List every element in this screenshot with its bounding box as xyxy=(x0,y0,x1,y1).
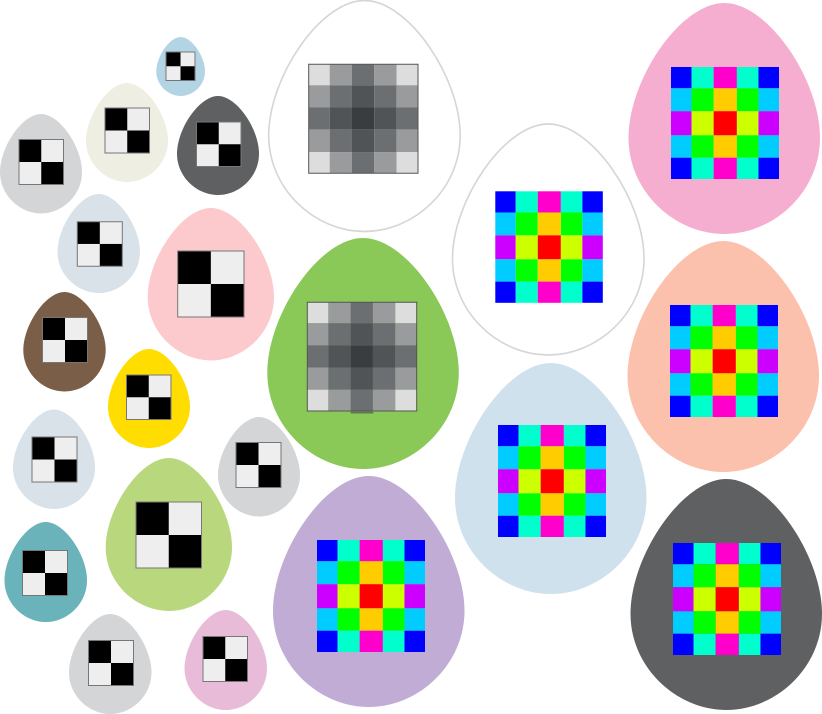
egg: dark grey with rainbow grid xyxy=(630,479,822,710)
egg: peach with rainbow grid xyxy=(628,241,819,472)
egg: beige xyxy=(86,83,168,182)
egg: brown xyxy=(23,292,106,391)
egg: pale blue-grey lower xyxy=(13,410,95,509)
egg: light grey upper left xyxy=(0,114,82,213)
egg: white outlined with grey grid xyxy=(269,0,460,232)
egg: light grey middle xyxy=(218,417,300,516)
egg: green with grey grid xyxy=(267,238,459,469)
egg: pink-lilac small xyxy=(184,610,267,710)
egg: teal xyxy=(4,522,87,622)
egg: light grey bottom xyxy=(69,614,152,714)
egg: pink with rainbow grid xyxy=(628,3,820,234)
egg: small blue xyxy=(156,37,205,96)
egg: pink medium xyxy=(148,208,274,360)
egg: yellow xyxy=(108,349,190,448)
egg: purple with rainbow grid xyxy=(273,476,464,707)
egg: white outlined with rainbow grid xyxy=(452,124,644,355)
egg: dark grey small xyxy=(177,96,259,195)
grid tab below green egg grid xyxy=(351,411,373,414)
egg: pale blue-grey upper xyxy=(58,194,140,293)
egg: pale blue with rainbow grid xyxy=(455,363,646,594)
egg: lime green medium xyxy=(106,458,232,611)
